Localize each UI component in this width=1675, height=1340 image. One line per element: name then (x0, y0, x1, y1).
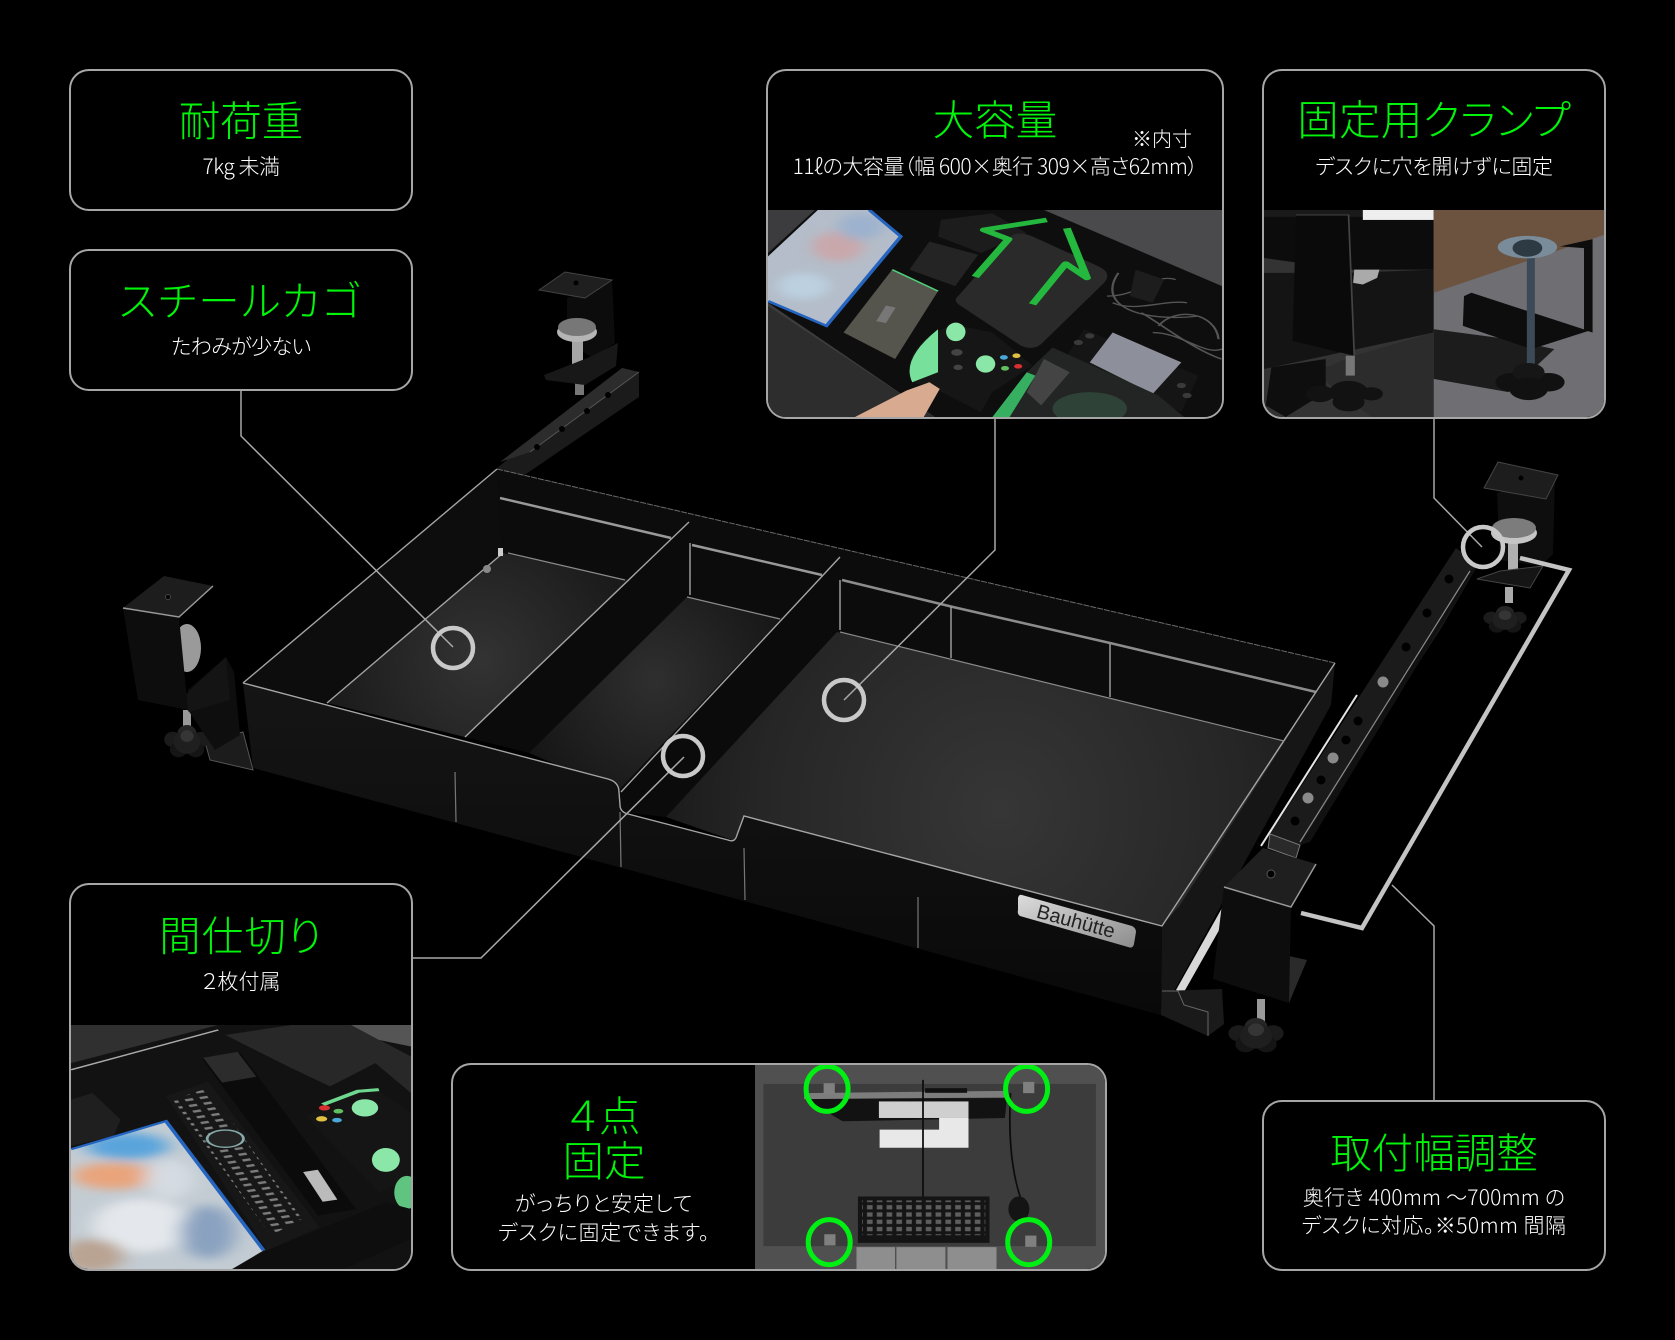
left front clamp (123, 576, 253, 770)
heading: width adjustment: 取付幅調整 (1330, 1120, 1538, 1180)
heading: load capacity: 耐荷重 (179, 88, 303, 148)
heading: fixing: 固定 (562, 1128, 646, 1188)
width adjustment bracket (1301, 558, 1569, 928)
text: stable fixing line two: デスクに固定できます。 (498, 1217, 710, 1247)
heading: large capacity: 大容量 (933, 87, 1057, 147)
text: fixes without drilling: デスクに穴を開けずに固定 (1315, 151, 1553, 181)
text: two included: ２枚付属 (202, 966, 280, 996)
text: little flex: たわみが少ない (171, 331, 311, 361)
text: stable fixing line one: がっちりと安定して (515, 1188, 693, 1218)
text: under 7kg: 7kg 未満 (202, 151, 280, 181)
note: inner dimensions: ※内寸 (1132, 123, 1192, 152)
text: depth range line one: 奥行き 400mm ～700mm の (1303, 1182, 1565, 1212)
photo: clamp close-ups (1264, 210, 1604, 417)
right front clamp (1213, 848, 1316, 1052)
panel: load capacity (69, 69, 413, 211)
brand badge: Bauhütte (1034, 901, 1117, 943)
leader lines (241, 390, 1482, 1101)
photo: dividers in use (71, 1025, 411, 1269)
left rear clamp and rail (497, 272, 639, 476)
right rear clamp (1477, 462, 1558, 633)
photo: filled drawer (768, 210, 1222, 417)
panel: dividers (69, 883, 413, 1271)
heading: steel basket: スチールカゴ (119, 268, 363, 328)
panel: four-point fixing (451, 1063, 1107, 1271)
text: capacity dimensions: 11ℓの大容量（幅 600×奥行 309×高さ62mm） (793, 151, 1197, 181)
heading: mounting clamp: 固定用クランプ (1297, 87, 1571, 147)
drawer tray (243, 469, 1335, 1015)
heading: four points: ４点 (567, 1083, 641, 1143)
heading: dividers: 間仕切り (159, 903, 323, 963)
text: depth range line two: デスクに対応。※50mm 間隔 (1302, 1210, 1566, 1240)
callout rings on product (433, 527, 1503, 776)
panel: steel basket (69, 249, 413, 391)
photo: top view of desk with four clamps (755, 1065, 1105, 1269)
brand badge (1018, 895, 1136, 948)
panel: width adjustment (1262, 1100, 1606, 1271)
panel: mounting clamp (1262, 69, 1606, 419)
right rail with slide (1161, 548, 1478, 1036)
panel: large capacity (766, 69, 1224, 419)
